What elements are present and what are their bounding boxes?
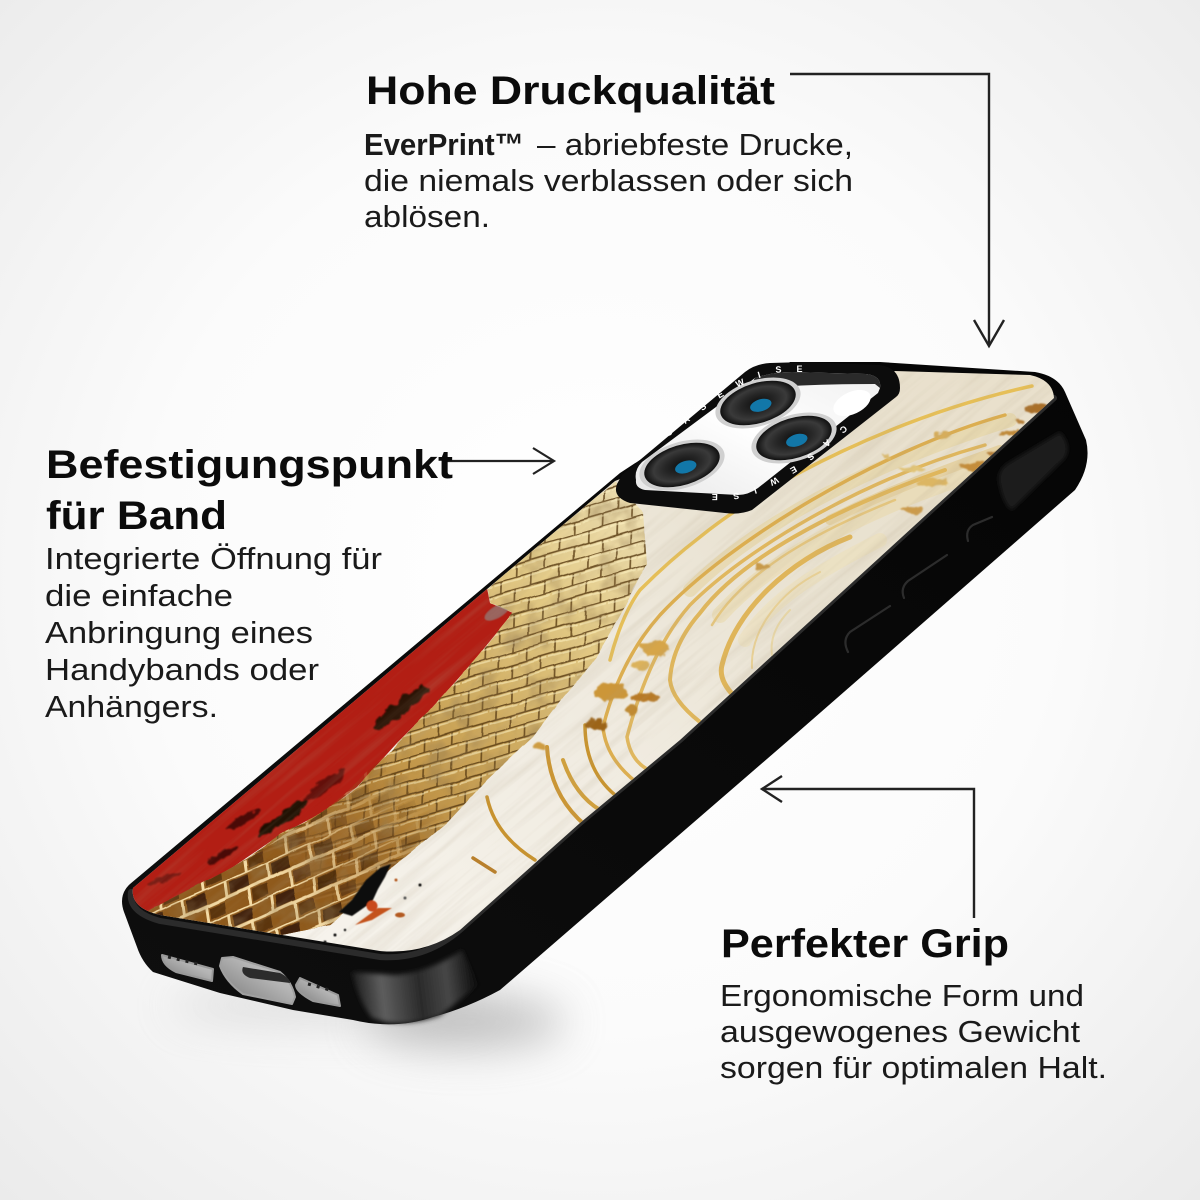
phone case bbox=[122, 362, 1088, 1026]
printed back bbox=[132, 371, 1054, 952]
description: EverPrint™ bbox=[364, 127, 524, 162]
description bbox=[45, 541, 382, 724]
usb opening bbox=[242, 967, 290, 983]
brick mortar bbox=[140, 481, 647, 938]
brick section bbox=[140, 481, 647, 938]
red paint bbox=[100, 588, 513, 914]
brand text upper: CASEWISE bbox=[668, 366, 802, 436]
bottom ports bbox=[162, 955, 340, 1006]
description: – abriebfeste Drucke, bbox=[537, 127, 853, 162]
description: Ergonomische Form und bbox=[720, 978, 1084, 1013]
heading: Hohe Druckqualität bbox=[366, 69, 775, 113]
corner reflection bbox=[352, 950, 478, 1023]
case body bbox=[122, 362, 1088, 1024]
arrow: grip bbox=[762, 776, 974, 918]
speaker right holes bbox=[308, 984, 330, 990]
brick lower dark bbox=[148, 767, 443, 935]
heading: Perfekter Grip bbox=[721, 922, 1009, 966]
brick colour bbox=[140, 481, 647, 938]
red dark blotches bbox=[147, 682, 431, 887]
bump frame bbox=[616, 362, 900, 514]
usb port bbox=[220, 957, 295, 1004]
description bbox=[364, 127, 853, 234]
heading bbox=[46, 443, 453, 538]
inner shadow bbox=[745, 372, 880, 394]
phone shadow bbox=[170, 987, 565, 1048]
text block: print quality bbox=[364, 69, 853, 234]
gold rings bbox=[473, 386, 1032, 872]
cream artwork base bbox=[132, 371, 1054, 952]
brand text lower: CASEWISE bbox=[712, 426, 847, 500]
gold splatter bbox=[532, 405, 1050, 752]
description: Integrierte Öffnung für bbox=[45, 541, 382, 576]
description: sorgen für optimalen Halt. bbox=[720, 1050, 1107, 1085]
black paint splash bbox=[324, 864, 422, 944]
speaker right bbox=[296, 978, 340, 1006]
description bbox=[720, 978, 1107, 1085]
description: ausgewogenes Gewicht bbox=[720, 1014, 1080, 1049]
text block: grip bbox=[720, 922, 1107, 1085]
speaker left holes bbox=[168, 957, 198, 964]
description: die einfache bbox=[45, 578, 233, 613]
description: Anhängers. bbox=[45, 689, 218, 724]
paint streaks bbox=[135, 374, 1013, 951]
camera glass bbox=[636, 372, 880, 495]
arrow: strap point bbox=[445, 448, 554, 474]
strap attachment recess bbox=[999, 432, 1068, 510]
lens top bbox=[709, 368, 807, 438]
pale gold sweeps bbox=[690, 420, 1010, 640]
grey paint patch bbox=[484, 605, 508, 622]
camera bump bbox=[616, 362, 900, 514]
brick lower pattern bbox=[152, 768, 445, 935]
brick mottling bbox=[168, 498, 647, 928]
lens left bbox=[633, 430, 731, 500]
lens right bbox=[745, 403, 843, 473]
description: Anbringung eines bbox=[45, 615, 313, 650]
heading: Befestigungspunkt bbox=[46, 443, 453, 487]
description: die niemals verblassen oder sich bbox=[364, 163, 853, 198]
speaker left bbox=[162, 955, 213, 981]
arrow: print quality bbox=[790, 74, 1004, 346]
text block: strap attachment bbox=[45, 443, 453, 724]
heading: für Band bbox=[46, 494, 227, 538]
case bezel highlight bbox=[131, 398, 1054, 957]
description: ablösen. bbox=[364, 199, 490, 234]
side buttons bbox=[845, 517, 992, 652]
description: Handybands oder bbox=[45, 652, 319, 687]
flash bbox=[829, 385, 875, 421]
